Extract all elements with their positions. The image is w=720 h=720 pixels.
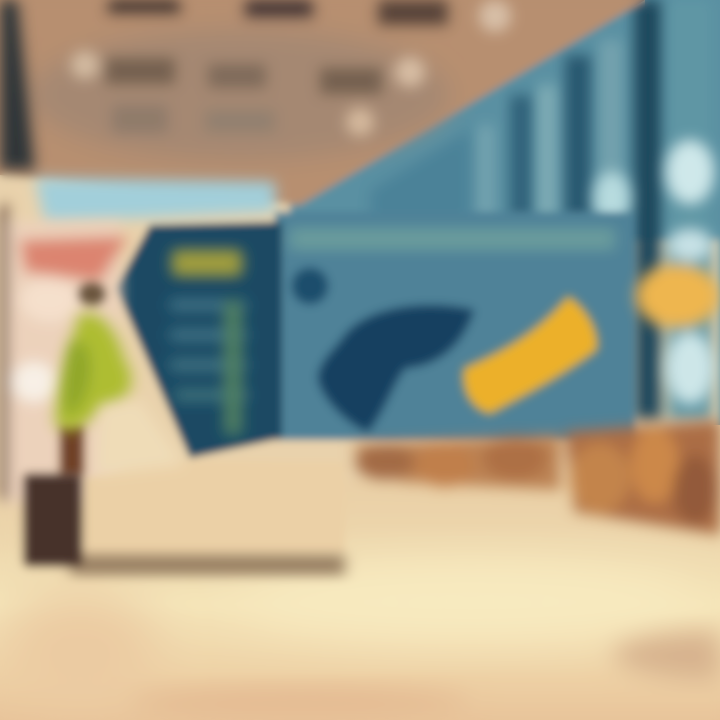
panel rows — [170, 300, 247, 435]
counter shadow — [70, 555, 345, 575]
blue wall — [275, 212, 635, 440]
floor — [0, 480, 720, 720]
left wall sign — [0, 205, 128, 502]
left dark edge — [0, 0, 35, 170]
dark post — [24, 474, 82, 566]
right upper wall with columns — [290, 0, 720, 420]
right seating — [350, 420, 720, 535]
dark map shape — [318, 305, 474, 432]
ceiling lights — [71, 0, 511, 136]
ceiling — [0, 0, 645, 205]
hanging lamps — [636, 140, 720, 404]
wall circle icon — [292, 268, 328, 304]
panel heading — [172, 250, 242, 276]
reception counter — [70, 400, 345, 575]
yellow banner — [463, 296, 598, 414]
plant — [55, 282, 132, 475]
light strip above wall — [35, 178, 275, 222]
dark directory panel — [116, 222, 282, 458]
